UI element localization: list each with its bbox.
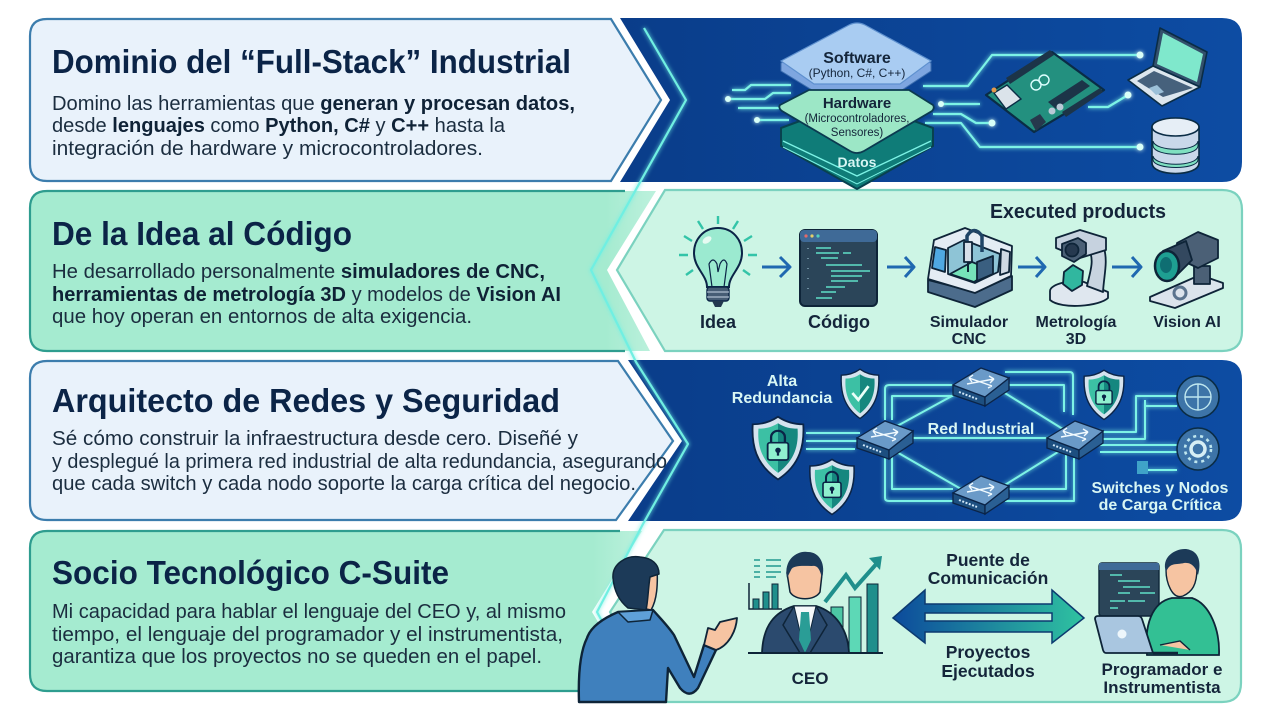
double arrow	[893, 590, 1084, 643]
step labels: 3D	[1066, 331, 1086, 348]
glowing chevron line	[591, 28, 688, 690]
icon: programmer at laptop	[1095, 549, 1219, 655]
layer: Software: (Python, C#, C++)	[809, 66, 905, 80]
heading: Dominio: Dominio del “Full-Stack” Industrial	[52, 44, 571, 81]
layer: Hardware: (Microcontroladores,	[805, 113, 909, 125]
heading: De la Idea: De la Idea al Código	[52, 216, 352, 253]
step labels: Simulador	[930, 314, 1008, 331]
body text: Socio Tecnológico: Mi capacidad para hablar el lenguaje del CEO y, al mismo	[52, 600, 566, 623]
step labels: Vision AI	[1153, 314, 1221, 331]
communication labels: Ejecutados	[941, 661, 1035, 681]
layer: Software	[781, 23, 931, 90]
icon: laptop	[1128, 28, 1207, 106]
layer: Datos	[781, 100, 933, 189]
layer: Hardware	[779, 90, 934, 153]
heading: Socio Tecnológico: Socio Tecnológico C-Suite	[52, 555, 449, 592]
body text: Arquitecto: y desplegué la primera red industrial de alta redundancia, asegurando	[52, 450, 667, 473]
communication labels: Puente de	[946, 550, 1030, 570]
heading: Arquitecto: Arquitecto de Redes y Seguridad	[52, 383, 560, 420]
network labels: de Carga Crítica	[1099, 497, 1221, 514]
communication labels	[792, 550, 1222, 697]
panel: network background	[628, 360, 1242, 521]
body text: Dominio: Domino las herramientas que generan y procesan datos,	[52, 92, 575, 115]
diagram: industrial network	[732, 368, 1229, 514]
body text: Socio Tecnológico: tiempo, el lenguaje del programador y el instrumentista,	[52, 623, 563, 646]
panel 1: Dominio del Full-Stack Industrial	[30, 19, 661, 181]
body text: De la Idea: que hoy operan en entornos de alta exigencia.	[52, 305, 472, 328]
icon: network nodes	[1137, 376, 1219, 474]
body text: Dominio: desde lenguajes como Python, C# y C++ hasta la	[52, 114, 506, 137]
diagram: full-stack layers and circuits	[725, 23, 1207, 189]
body text: Dominio	[52, 92, 575, 160]
network links	[806, 372, 1177, 501]
icon: microcontroller board	[986, 50, 1104, 132]
switches	[857, 368, 1103, 514]
body text: De la Idea: He desarrollado personalmente simuladores de CNC,	[52, 260, 545, 283]
circuit lines	[725, 52, 1144, 150]
layer: Hardware: Sensores)	[831, 127, 883, 139]
panel: communication background	[610, 530, 1241, 702]
body text: Socio Tecnológico: garantiza que los proyectos no se queden en el papel.	[52, 645, 542, 668]
step labels: Metrología	[1036, 314, 1117, 331]
arrows between steps	[762, 257, 1141, 277]
step labels: CNC	[952, 331, 987, 348]
body text: De la Idea	[52, 260, 561, 328]
icon: database	[1152, 118, 1199, 174]
step labels	[700, 312, 1221, 348]
network labels: Red Industrial	[928, 421, 1034, 438]
diagram: communication bridge	[748, 549, 1222, 697]
icon: CEO with charts	[748, 552, 883, 653]
icon: light bulb	[679, 216, 757, 307]
panel 3: Arquitecto de Redes y Seguridad	[30, 361, 673, 520]
communication labels: Proyectos	[946, 642, 1031, 662]
panel: stack diagram background	[620, 18, 1242, 182]
network labels: Alta	[767, 373, 797, 390]
body text: Arquitecto	[52, 427, 667, 495]
body text: Dominio: integración de hardware y microcontroladores.	[52, 137, 483, 160]
layer: Datos: Datos	[838, 154, 877, 170]
panel 4: Socio Tecnológico C-Suite	[30, 531, 642, 691]
communication labels: CEO	[792, 669, 828, 688]
network labels: Switches y Nodos	[1092, 480, 1229, 497]
step labels: Código	[808, 312, 870, 332]
panel 2: De la Idea al Código	[30, 191, 656, 351]
icon: presenter seen from behind	[579, 557, 737, 702]
diagram: idea to executed products	[679, 201, 1223, 348]
communication labels: Instrumentista	[1103, 678, 1221, 697]
label: Executed products: Executed products	[990, 201, 1166, 223]
icon: code window	[800, 230, 877, 306]
communication labels: Programador e	[1102, 660, 1222, 679]
icon: 3D metrology scanner	[1050, 230, 1108, 306]
network labels: Redundancia	[732, 390, 832, 407]
communication labels: Comunicación	[928, 568, 1048, 588]
layer: Software: Software	[823, 50, 891, 67]
body text: Arquitecto: que cada switch y cada nodo soporte la carga crítica del negocio.	[52, 472, 636, 495]
icon: shields	[753, 369, 1124, 514]
icon: CNC simulator	[928, 228, 1012, 307]
layer: Hardware: Hardware	[823, 95, 891, 112]
network labels	[732, 373, 1229, 514]
panel: idea to product background	[617, 190, 1242, 351]
step labels: Idea	[700, 312, 737, 332]
body text: Arquitecto: Sé cómo construir la infraestructura desde cero. Diseñé y	[52, 427, 579, 450]
body text: Socio Tecnológico	[52, 600, 566, 668]
body text: De la Idea: herramientas de metrología 3D y modelos de Vision AI	[52, 283, 561, 306]
icon: vision camera	[1150, 232, 1223, 308]
